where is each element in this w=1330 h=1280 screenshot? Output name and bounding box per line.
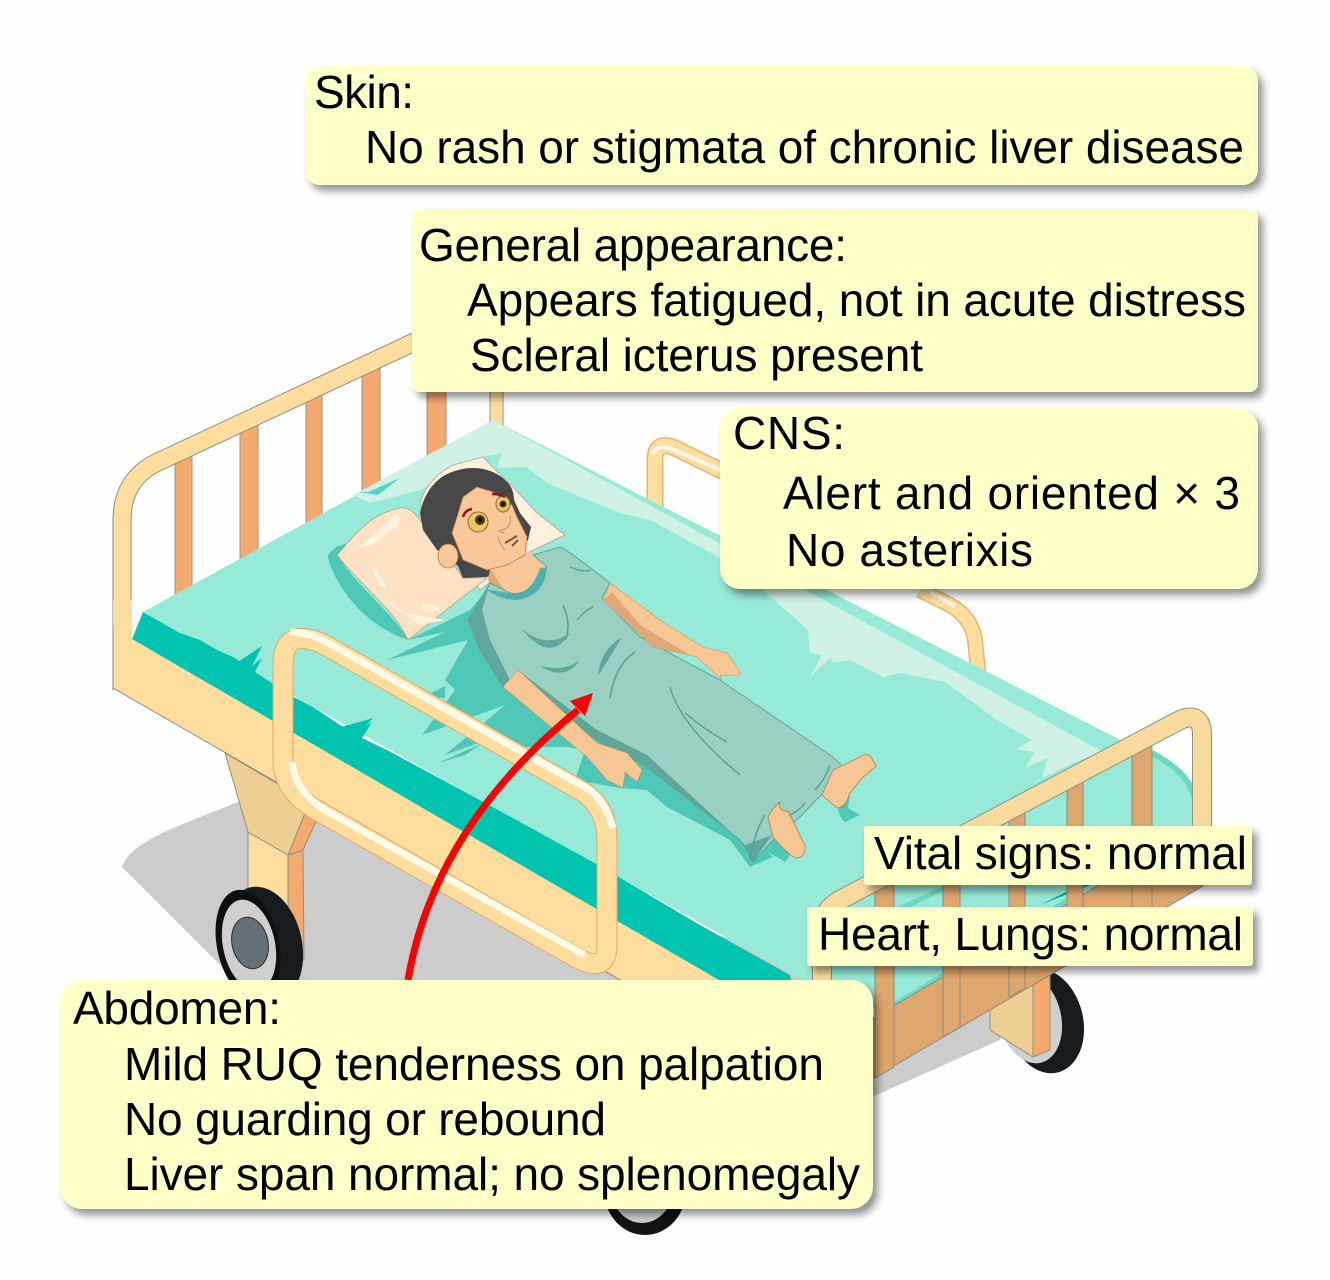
bed frame xyxy=(113,600,872,1125)
gown xyxy=(468,547,843,862)
callout: abdomen: No guarding or rebound xyxy=(124,1093,606,1145)
callout: vital signs: Vital signs: normal xyxy=(874,827,1247,879)
callout: CNS: Alert and oriented × 3 xyxy=(783,467,1240,519)
footboard xyxy=(822,718,1203,1078)
callout: general appearance xyxy=(412,209,1258,392)
right arm xyxy=(603,583,740,680)
front leg xyxy=(225,753,318,960)
feet xyxy=(768,754,876,858)
headboard xyxy=(122,330,503,690)
far side rail xyxy=(652,446,980,690)
mattress side band xyxy=(132,612,800,1030)
patient shadow on mattress xyxy=(328,543,860,867)
callout: general appearance: Appears fatigued, not in acute distress xyxy=(467,274,1246,326)
callout: abdomen xyxy=(60,980,873,1209)
front side rail xyxy=(283,632,613,964)
bottom wheel xyxy=(604,1145,686,1235)
callout: abdomen: Abdomen: xyxy=(73,982,281,1034)
callout: abdomen: Mild RUQ tenderness on palpation xyxy=(124,1038,824,1090)
patient xyxy=(420,468,876,862)
callout: heart and lungs: Heart, Lungs: normal xyxy=(818,908,1243,960)
callout: CNS: No asterixis xyxy=(786,524,1033,576)
callout: skin: No rash or stigmata of chronic liver disease xyxy=(365,121,1244,173)
callout: CNS: CNS: xyxy=(733,407,845,459)
floor shadow xyxy=(122,802,1020,1097)
pillow xyxy=(337,457,565,640)
callout: general appearance: Scleral icterus present xyxy=(470,329,923,381)
front wheel xyxy=(206,879,313,1011)
callout: general appearance: General appearance: xyxy=(419,219,847,271)
hair xyxy=(420,468,531,578)
frame lower edge xyxy=(113,625,872,1125)
callout: abdomen: Liver span normal; no splenomegaly xyxy=(124,1148,860,1200)
callout: skin xyxy=(305,66,1258,185)
left arm xyxy=(503,670,642,788)
callout: CNS xyxy=(720,407,1258,589)
mattress light headend xyxy=(353,420,1103,778)
illustration: hospital bed with patient xyxy=(113,330,1203,1235)
neck xyxy=(490,552,547,597)
callout: skin: Skin: xyxy=(314,66,414,118)
arrow to abdomen xyxy=(408,693,593,980)
mattress xyxy=(132,420,1197,1030)
rear wheel xyxy=(989,960,1095,1082)
face xyxy=(438,487,527,570)
